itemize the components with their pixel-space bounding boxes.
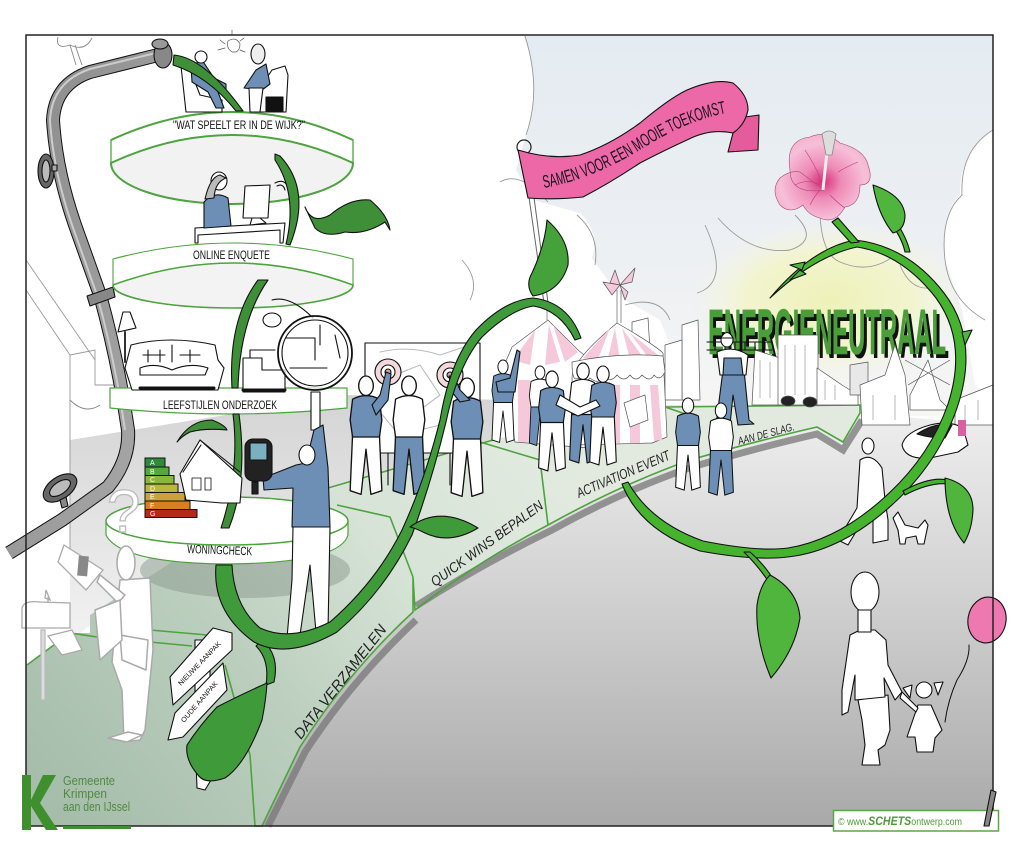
- balloon: [964, 594, 1010, 646]
- people at tents: [492, 350, 616, 471]
- clouds: [462, 36, 993, 320]
- vine: main lower curve with leaf: [216, 298, 581, 649]
- flag pole: [528, 190, 549, 310]
- map board: [365, 343, 480, 485]
- road edge shadow: [268, 420, 862, 826]
- house: [180, 440, 242, 503]
- vine: pipe to armchairs: [173, 55, 243, 111]
- energy label: F: [150, 503, 154, 510]
- signpost: OUDE AANPAK: [180, 680, 220, 724]
- icon: pencil: [984, 790, 996, 826]
- leaf on house roof: [177, 420, 227, 442]
- signpost: [168, 628, 232, 790]
- logo: gemeente krimpen aan den ijssel: Krimpen: [63, 787, 107, 801]
- signpost: NIEUWE AANPAK: [177, 641, 223, 687]
- father and daughter: [842, 572, 969, 765]
- banner: samen voor een mooie toekomst: SAMEN VOOR EEN MOOIE TOEKOMST: [542, 101, 724, 188]
- magnifier: [278, 316, 352, 430]
- hibiscus flower: [775, 131, 870, 220]
- stage disc: woningcheck: [106, 497, 348, 564]
- leaves on big vine: [757, 185, 973, 678]
- man with magnifier and device: [245, 425, 330, 638]
- ground: light grey left area: [70, 395, 500, 640]
- sky: [470, 36, 993, 420]
- step label: activation event: ACTIVATION EVENT: [573, 447, 673, 501]
- woman at computer: [195, 172, 288, 243]
- shadow under woningcheck disc: [140, 542, 350, 598]
- banner: samen voor een mooie toekomst: [516, 81, 760, 310]
- stage disc: leefstijlen onderzoek: [110, 388, 347, 414]
- credit box: [834, 810, 998, 831]
- people at map board: [350, 372, 483, 496]
- walking man with dog: [838, 438, 928, 545]
- energy label: D: [150, 486, 155, 493]
- vine: woningcheck segment: [221, 414, 242, 528]
- tents: [500, 268, 667, 448]
- stage disc: leefstijlen onderzoek: LEEFSTIJLEN ONDERZOEK: [163, 398, 277, 412]
- people watching worker: [676, 398, 733, 495]
- green walkway band: [26, 405, 860, 826]
- energy label: [145, 458, 197, 518]
- energy label: B: [150, 469, 155, 476]
- logo: gemeente krimpen aan den ijssel: [22, 774, 131, 830]
- walkway green lines: [27, 405, 860, 826]
- stage disc: woningcheck: WONINGCHECK: [187, 542, 252, 558]
- people in armchairs: [181, 30, 288, 112]
- energy label: C: [150, 477, 155, 484]
- road: [262, 413, 993, 826]
- energy label: E: [150, 494, 155, 501]
- logo: gemeente krimpen aan den ijssel: aan den IJssel: [63, 800, 130, 814]
- step label: aan de slag: AAN DE SLAG.: [736, 421, 796, 448]
- worker with ladder: [707, 332, 772, 425]
- vine: leefstijlen segment: [232, 280, 268, 388]
- vine: online enquete segment with leaf: [275, 154, 390, 245]
- credit box: © www.SCHETSontwerp.com: [838, 814, 962, 828]
- postman: [95, 546, 153, 742]
- stage disc: wat speelt er in de wijk: [111, 112, 353, 204]
- step label: data verzamelen: DATA VERZAMELEN: [291, 622, 390, 742]
- mailbox: [22, 545, 103, 700]
- house outline background: [26, 37, 120, 560]
- leaf on pole: [529, 220, 568, 296]
- energy label: G: [150, 511, 155, 518]
- city skyline right: [752, 335, 993, 425]
- stage disc: wat speelt er in de wijk: "WAT SPEELT ER IN DE WIJK?": [173, 118, 305, 132]
- stage disc: online enquete: [113, 243, 353, 308]
- energy label: A: [150, 460, 155, 467]
- pipe flange and valves: [38, 39, 172, 508]
- logo: gemeente krimpen aan den ijssel: Gemeente: [63, 774, 115, 788]
- question mark: ?: [107, 478, 140, 545]
- vine: big circle to flower: [622, 218, 966, 584]
- city skyline left: [632, 318, 700, 400]
- car: [902, 420, 968, 458]
- big leaf at signpost: [187, 640, 276, 781]
- pipe: [9, 52, 162, 553]
- step label: quick wins bepalen: QUICK WINS BEPALEN: [427, 497, 547, 589]
- stage disc: online enquete: ONLINE ENQUETE: [193, 248, 270, 262]
- sofa, lamp and chair: [118, 299, 313, 392]
